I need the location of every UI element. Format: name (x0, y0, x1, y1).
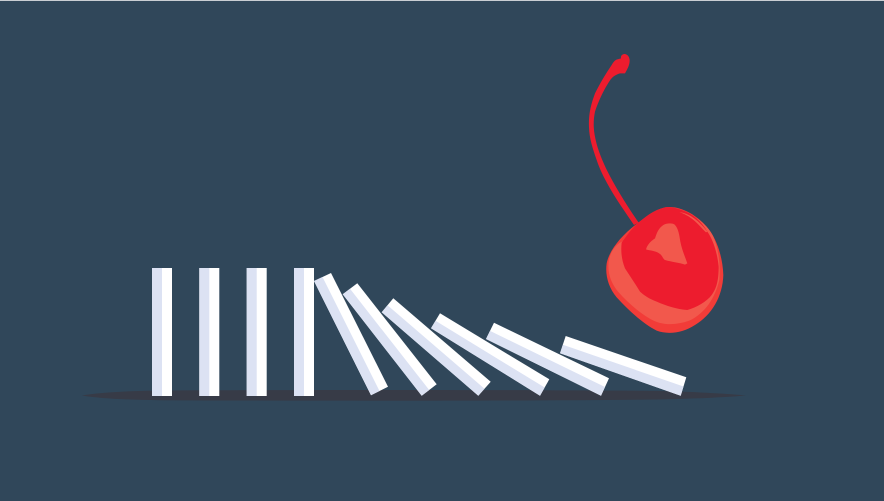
falling domino 5 (486, 323, 609, 396)
standing domino 2 (199, 268, 219, 396)
falling domino 2 (343, 283, 437, 396)
ground shadow (82, 390, 746, 401)
outer rim (606, 207, 723, 333)
cherry body (606, 207, 723, 333)
standing domino 4 (294, 268, 314, 396)
falling domino 6 (560, 336, 686, 396)
light shading (608, 211, 720, 324)
standing domino 3 (247, 268, 267, 396)
cherry stem (589, 54, 639, 225)
falling domino 4 (431, 313, 549, 396)
main red (621, 207, 719, 310)
falling domino 1 (314, 273, 388, 395)
standing domino 1 (152, 268, 172, 396)
highlight (646, 223, 687, 265)
falling domino 3 (382, 298, 491, 396)
top-right crescent (679, 212, 707, 232)
